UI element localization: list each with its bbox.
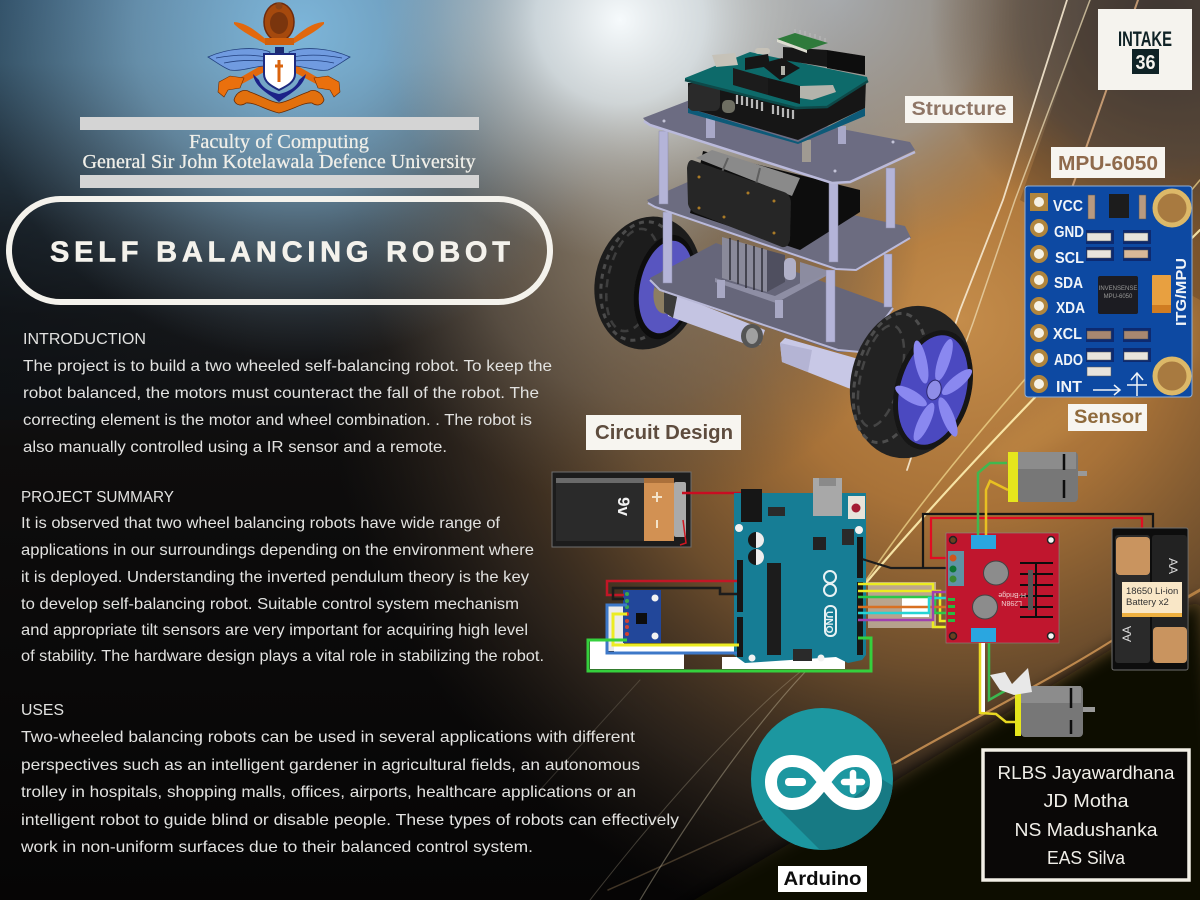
wire: red power	[682, 492, 752, 494]
team names box: EAS Silva	[1047, 848, 1126, 868]
title: SELF BALANCING ROBOT	[50, 236, 510, 268]
text block: introduction: also manually controlled using a IR sensor and a remote.	[23, 439, 447, 456]
label: circuit design	[586, 415, 741, 450]
icon: scroll	[234, 90, 324, 113]
team names box: NS Madushanka	[1014, 820, 1159, 840]
9v battery	[552, 472, 691, 547]
label: circuit design: Circuit Design	[595, 422, 733, 444]
text block: introduction	[23, 331, 552, 456]
battery holder: AA	[1120, 626, 1134, 642]
battery holder: Battery x2	[1126, 597, 1169, 608]
badge: intake 36: INTAKE	[1118, 28, 1172, 51]
sensor photo: mpu-6050: VCC	[1053, 198, 1083, 215]
label: mpu-6050	[1051, 147, 1165, 178]
sensor photo: mpu-6050: INVENSENSE	[1099, 286, 1137, 292]
wires: motor driver signals	[858, 584, 952, 627]
battery holder: AA	[1166, 558, 1180, 574]
arduino stack	[685, 29, 868, 144]
sensor photo: mpu-6050: SCL	[1055, 250, 1084, 267]
motor: bottom	[990, 668, 1095, 737]
sensor photo: mpu-6050: INT	[1056, 379, 1082, 396]
text block: uses: work in non-uniform surfaces due to their balanced control system.	[20, 839, 533, 856]
team names box: RLBS Jayawardhana	[998, 763, 1176, 783]
sensor photo: mpu-6050: XCL	[1053, 326, 1082, 343]
icon: arduino logo	[751, 708, 900, 852]
badge: intake 36	[1098, 9, 1192, 90]
battery holder: 18650 Li-ion	[1126, 586, 1178, 597]
plate: middle	[647, 181, 911, 270]
text block: project summary: of stability. The hardware design plays a vital role in stabilizing the robot.	[21, 648, 544, 665]
motor driver board: L298N	[1001, 599, 1022, 606]
icon: left wheel	[582, 206, 714, 360]
sensor photo: mpu-6050: GND	[1054, 224, 1084, 241]
sensor photo: mpu-6050: MPU-6050	[1104, 294, 1133, 300]
circuit diagram	[552, 452, 1188, 737]
label: mpu-6050: MPU-6050	[1058, 153, 1158, 175]
icon: seal	[264, 2, 294, 45]
pillars: lower	[663, 212, 892, 342]
text block: project summary	[21, 489, 544, 665]
icon: lions	[218, 76, 340, 97]
heading: university: General Sir John Kotelawala Defence University	[82, 151, 476, 173]
wires: sensor side	[588, 581, 871, 671]
wire backing: white	[590, 582, 936, 669]
text block: project summary: it is deployed. Understanding the inverted pendulum theory is the key	[21, 569, 529, 586]
motor: left	[664, 288, 765, 348]
text block: uses: USES	[21, 702, 64, 719]
text block: introduction: robot balanced, the motors must counteract the fall of the robot. The	[23, 385, 539, 402]
sensor photo: mpu-6050: SDA	[1054, 275, 1083, 292]
9v battery: 9v	[614, 497, 633, 516]
motor: top	[1008, 452, 1087, 502]
sensor photo: mpu-6050: ITG/MPU	[1173, 258, 1190, 326]
plate: top	[643, 100, 915, 183]
text block: project summary: It is observed that two wheel balancing robots have wide range of	[21, 515, 501, 532]
pillars: upper	[659, 131, 895, 262]
text block: project summary: PROJECT SUMMARY	[21, 489, 174, 506]
sensor photo: mpu-6050: XDA	[1056, 300, 1085, 317]
label: arduino	[778, 866, 867, 892]
heading: faculty: Faculty of Computing	[189, 131, 369, 153]
small mpu module	[623, 590, 661, 643]
sensor photo: mpu-6050: ADO	[1054, 352, 1083, 369]
title pill	[9, 199, 550, 302]
icon: right wheel	[834, 293, 988, 471]
text block: project summary: to develop self-balancing robot. Suitable control system mechanism	[21, 596, 519, 613]
icon: shield	[264, 47, 295, 90]
text block: project summary: and appropriate tilt sensors are very important for acquiring high level	[21, 622, 528, 639]
motor driver board	[946, 533, 1059, 643]
label: sensor	[1068, 404, 1147, 431]
team names box	[983, 750, 1189, 880]
icon: wings	[208, 49, 350, 70]
team names box: JD Motha	[1044, 791, 1130, 811]
label: sensor: Sensor	[1074, 407, 1143, 428]
battery pack	[687, 150, 860, 250]
badge: intake 36: 36	[1136, 52, 1156, 74]
label: arduino: Arduino	[784, 869, 862, 890]
wires: driver power	[862, 514, 1153, 568]
text block: project summary: applications in our surroundings depending on the environment where	[21, 542, 534, 559]
text block: uses: Two-wheeled balancing robots can be used in several applications with different	[21, 729, 636, 746]
text block: uses: perspectives such as an intelligent gardener in agricultural fields, an autonomous	[21, 757, 640, 774]
text block: uses: intelligent robot to guide blind or disable people. These types of robots can effectively	[21, 812, 679, 829]
label: structure: Structure	[912, 99, 1006, 120]
icon: crossed swords	[234, 22, 324, 85]
sensor photo: mpu-6050	[1025, 186, 1192, 397]
text block: introduction: INTRODUCTION	[23, 331, 146, 348]
label: structure	[905, 96, 1013, 123]
text block: introduction: correcting element is the motor and wheel combination. . The robot is	[23, 412, 532, 429]
arduino uno board	[734, 478, 866, 663]
logo: university crest	[208, 2, 350, 113]
motor: right	[780, 338, 862, 392]
battery holder	[1112, 528, 1188, 670]
header bars and faculty text	[80, 117, 479, 188]
plate: bottom	[650, 243, 893, 352]
text block: introduction: The project is to build a two wheeled self-balancing robot. To keep the	[23, 358, 552, 375]
text block: uses	[20, 702, 679, 856]
wires: motors	[978, 463, 1016, 722]
illustration: robot structure	[582, 29, 988, 471]
arduino uno board: UNO	[823, 611, 834, 633]
text block: uses: trolley in hospitals, shopping malls, offices, airports, healthcare applications or an	[21, 784, 636, 801]
motor driver board: H-Bridge	[998, 591, 1026, 598]
icon: anchor	[253, 74, 306, 102]
heat sink and driver	[715, 237, 826, 318]
